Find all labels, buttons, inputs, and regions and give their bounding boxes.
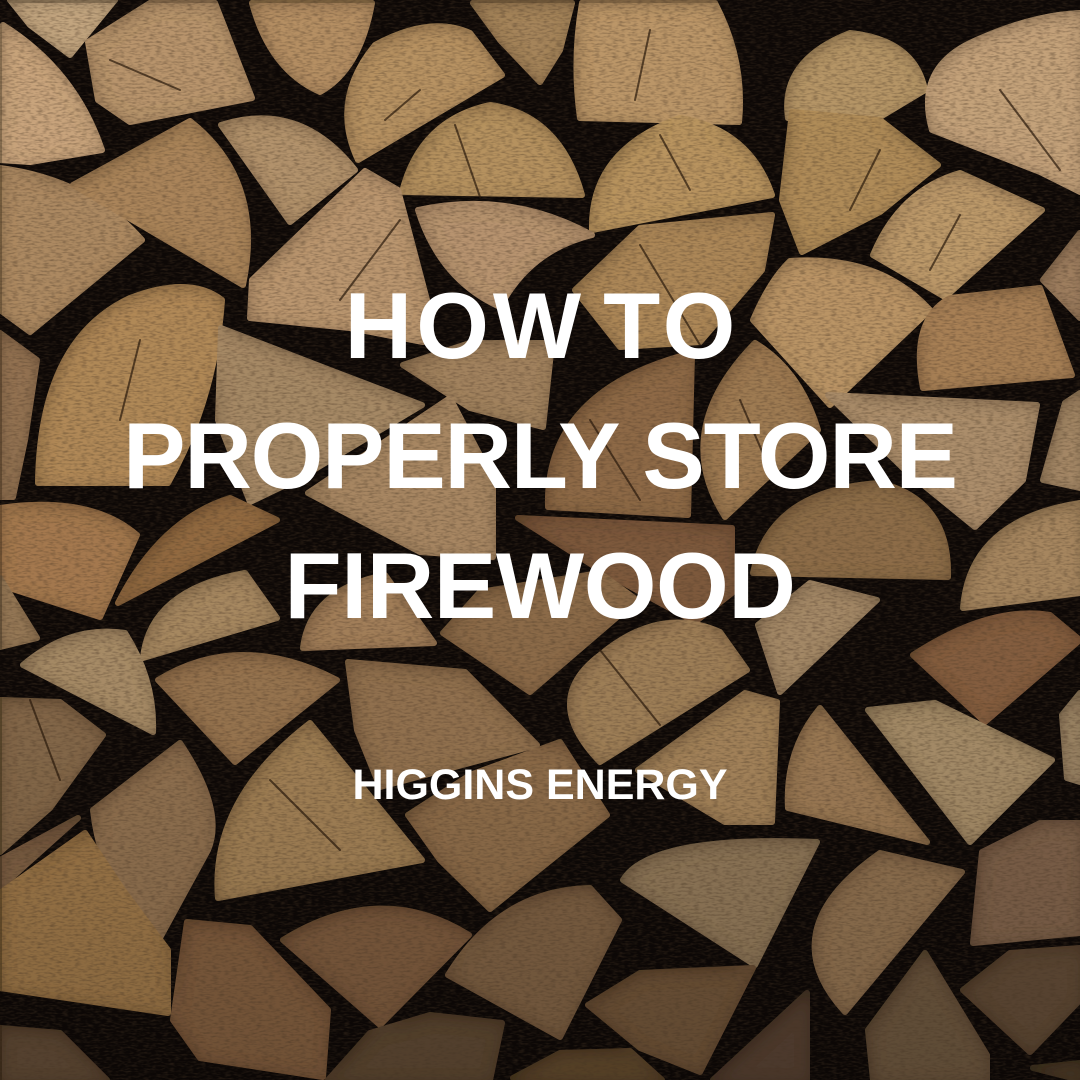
- title: PROPERLY STORE: [123, 403, 957, 508]
- title: FIREWOOD: [284, 533, 796, 638]
- subtitle: brand name: HIGGINS ENERGY: [352, 761, 728, 809]
- title: HOW TO: [345, 273, 739, 378]
- title: [123, 273, 957, 638]
